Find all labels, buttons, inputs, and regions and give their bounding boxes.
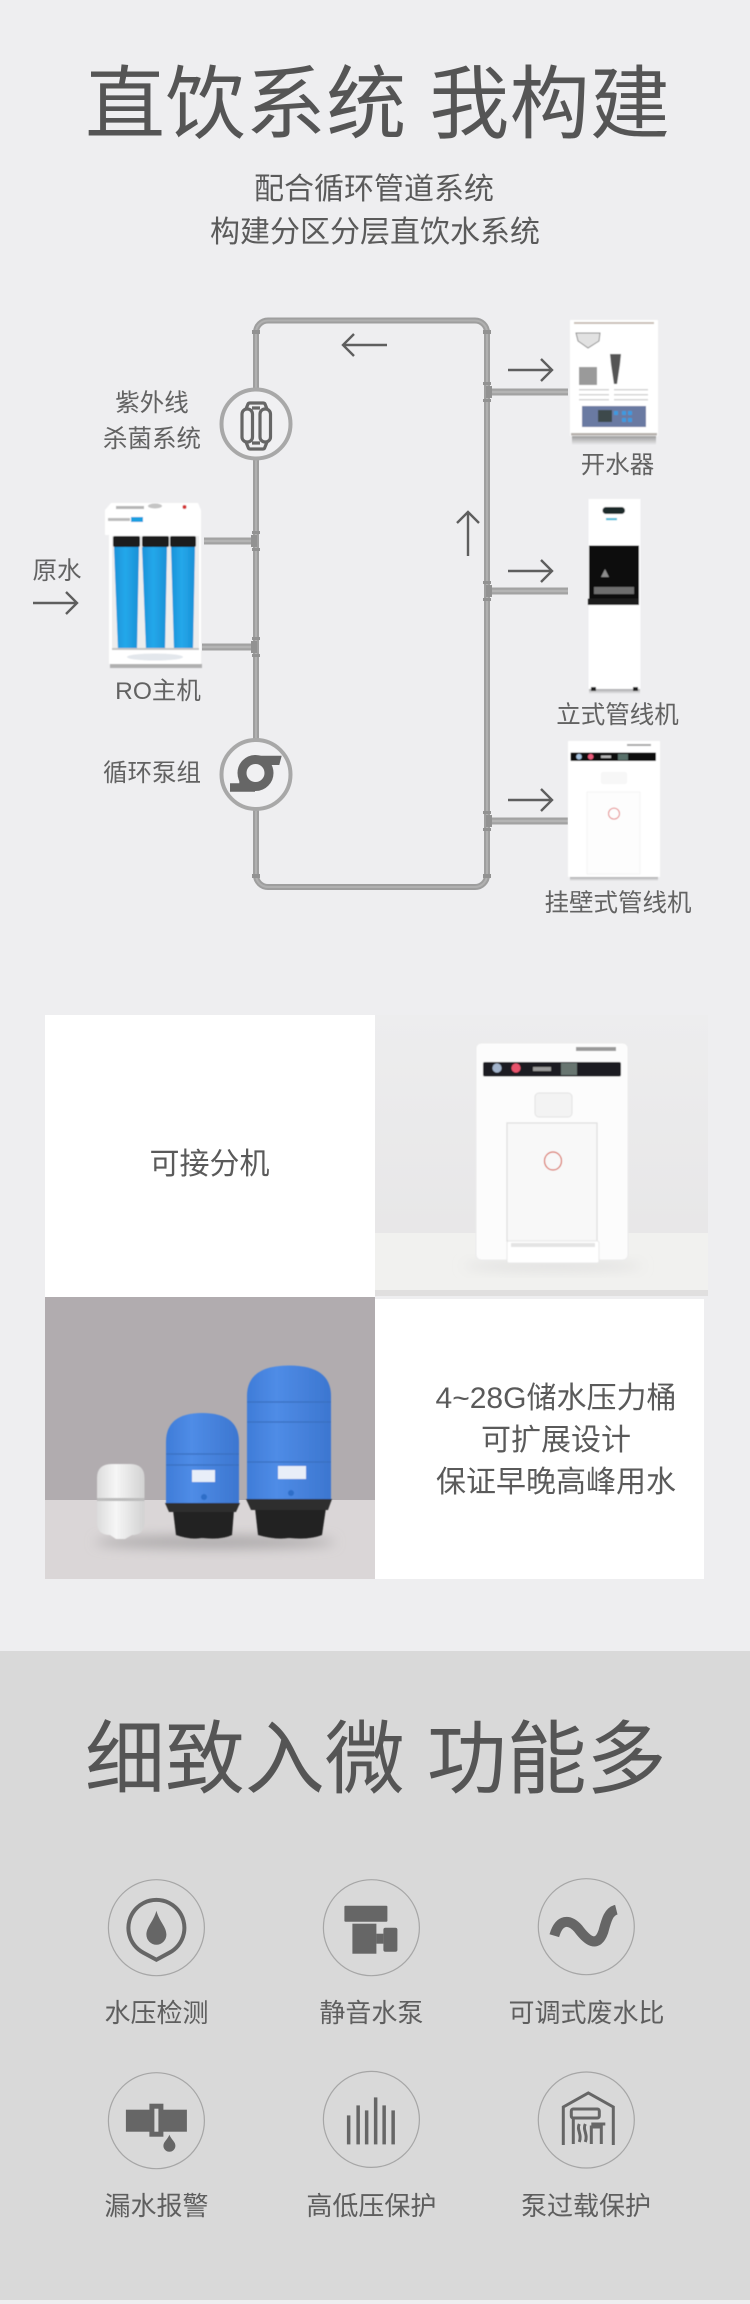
- icon: pressure drop: [108, 1880, 204, 1976]
- label: RO host: RO主机: [115, 677, 201, 705]
- label: boiler: 开水器: [581, 451, 654, 479]
- feature: leak alarm: [104, 2073, 209, 2221]
- feature: pump overload protection: 泵过载保护: [521, 2191, 651, 2221]
- label: standing machine: 立式管线机: [556, 701, 679, 729]
- icon: pump: [323, 1880, 419, 1976]
- label: UV sterilization: [103, 389, 201, 453]
- heading: features: 细致入微 功能多: [85, 1715, 666, 1804]
- feature: adjustable waste-water ratio: [508, 1879, 665, 2028]
- feature: leak alarm: 漏水报警: [104, 2191, 209, 2221]
- card: pressure tank text: [375, 1299, 704, 1579]
- label: wall machine: 挂壁式管线机: [544, 889, 692, 917]
- subtitle: [210, 173, 540, 249]
- product: wall-mounted machine: [568, 741, 660, 881]
- product: water boiler: [570, 320, 658, 445]
- feature: quiet pump: 静音水泵: [319, 1998, 423, 2028]
- white tank: [97, 1464, 144, 1539]
- icon: bars: [323, 2071, 419, 2167]
- label: UV sterilization: 杀菌系统: [103, 425, 201, 453]
- card: pressure tank text: 4~28G储水压力桶: [436, 1382, 676, 1415]
- panel: extension grid: [45, 1015, 708, 1579]
- feature: water pressure detection: 水压检测: [104, 1998, 209, 2028]
- card: connectable sub-machine: [45, 1015, 375, 1297]
- photo: pressure tanks: [45, 1297, 375, 1579]
- card: pressure tank text: 保证早晚高峰用水: [436, 1466, 676, 1499]
- photo: wall-mounted dispenser: [375, 1015, 708, 1296]
- label: raw water: 原水: [32, 557, 82, 585]
- feature: pump overload protection: [521, 2072, 651, 2221]
- icon: leaking pipe: [108, 2073, 204, 2169]
- feature: high/low pressure protection: 高低压保护: [306, 2191, 436, 2221]
- subtitle: 配合循环管道系统: [254, 173, 494, 206]
- card: connectable sub-machine: 可接分机: [150, 1148, 270, 1181]
- product: standing pipeline machine: [588, 499, 640, 694]
- diagram: circulation system: [32, 320, 692, 917]
- flow arrows: [33, 334, 552, 811]
- icon: circulation pump: [222, 740, 290, 809]
- feature: adjustable waste-water ratio: 可调式废水比: [508, 1998, 665, 2028]
- feature: quiet pump: [319, 1880, 423, 2028]
- icon: pump house: [538, 2072, 634, 2168]
- medium tank: [165, 1413, 240, 1539]
- icon: UV sterilizer: [222, 390, 290, 458]
- label: UV sterilization: 紫外线: [115, 389, 189, 417]
- subtitle: 构建分区分层直饮水系统: [210, 216, 540, 249]
- icon: wave: [538, 1879, 634, 1975]
- card: pressure tank text: 可扩展设计: [481, 1424, 631, 1457]
- panel: features: [0, 1651, 750, 2300]
- label: circulation pump: 循环泵组: [103, 759, 201, 787]
- title: 直饮系统 我构建: [85, 60, 670, 149]
- feature: water pressure detection: [104, 1880, 209, 2028]
- large tank: [246, 1366, 332, 1539]
- feature: high/low pressure protection: [306, 2071, 436, 2221]
- pipe loop: [202, 320, 568, 887]
- product: RO host: [105, 503, 202, 668]
